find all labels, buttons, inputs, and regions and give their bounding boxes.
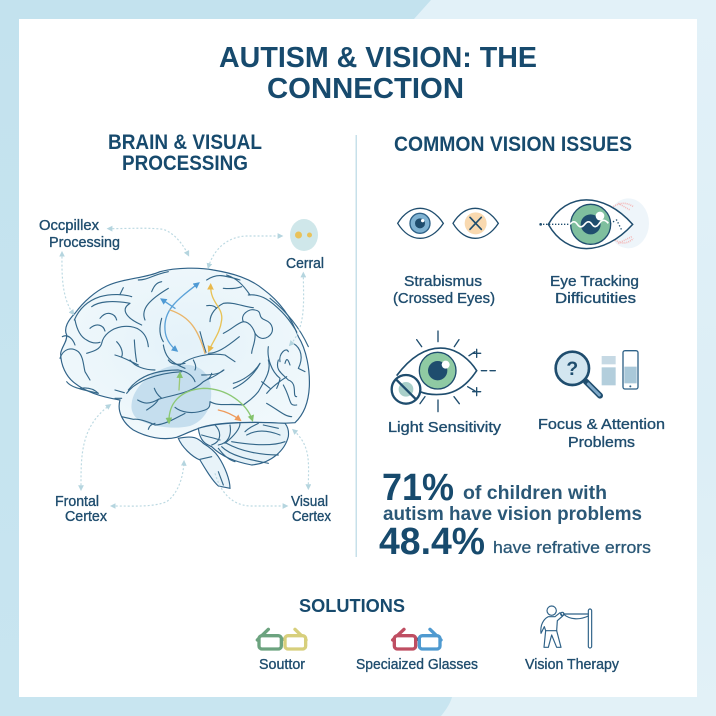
divider — [356, 135, 357, 557]
title: CONNECTION — [267, 73, 464, 105]
label: strabismus: Strabismus — [404, 274, 482, 290]
label: focus and attention: Problems — [568, 435, 635, 451]
statistic: 71 percent: 71% — [382, 467, 454, 509]
label: vision therapy: Vision Therapy — [525, 657, 620, 673]
label: strabismus: (Crossed Eyes) — [393, 291, 495, 307]
icon: strabismus eyes — [398, 208, 498, 238]
title: AUTISM & VISION: THE — [219, 42, 537, 74]
icon: focus magnifier and phone — [556, 351, 638, 396]
icon: green and yellow glasses — [257, 629, 306, 649]
label: visual certex: Certex — [292, 509, 332, 525]
brainstem — [178, 437, 230, 488]
statistic: 48.4 percent: 48.4% — [379, 521, 485, 563]
label: light sensitivity: Light Sensitivity — [388, 420, 502, 436]
coloured pathways — [162, 283, 252, 422]
dashed connector arrows — [62, 228, 309, 506]
panel: brain and visual processing — [39, 131, 332, 525]
label: occpillex processing: Occpillex — [39, 218, 100, 234]
statistic: 48.4 percent — [379, 521, 651, 563]
label: frontal certex — [55, 494, 108, 525]
icon: central node — [290, 219, 318, 251]
folds: parietal and occipital — [180, 275, 308, 388]
label: occpillex processing: Processing — [49, 235, 120, 251]
label: souttor: Souttor — [259, 657, 305, 673]
panel: common vision issues — [379, 133, 665, 563]
heading: common vision issues: COMMON VISION ISSUES — [394, 133, 632, 156]
label: eye tracking — [550, 274, 639, 307]
statistic: 71 percent: of children with — [463, 483, 607, 504]
label: visual certex: Visual — [291, 494, 328, 510]
label: focus and attention — [538, 417, 665, 451]
label: eye tracking: Eye Tracking — [550, 274, 639, 290]
icon: vision therapy figure — [541, 606, 592, 648]
label: strabismus — [393, 274, 495, 307]
label: frontal certex: Frontal — [55, 494, 99, 510]
label: specialized glasses: Speciaized Glasses — [356, 657, 478, 673]
icon: red and blue glasses — [393, 629, 441, 649]
icon: light sensitivity eye — [392, 331, 495, 412]
heading: brain and visual processing: PROCESSING — [122, 152, 248, 175]
title — [219, 42, 537, 105]
cerebellum — [198, 422, 289, 465]
panel: solutions — [257, 596, 620, 673]
brain outline — [61, 268, 309, 439]
temporal lobe highlight — [131, 365, 211, 428]
label: eye tracking: Difficutities — [555, 291, 636, 307]
folds: frontal — [60, 272, 185, 393]
icon: focus magnifier and phone: ? — [566, 359, 578, 380]
statistic: 71 percent — [382, 467, 642, 525]
label: frontal certex: Certex — [65, 509, 108, 525]
label: focus and attention: Focus & Attention — [538, 417, 665, 433]
label: visual certex — [291, 494, 332, 525]
folds: temporal and cerebellum — [115, 360, 297, 488]
icon: eye tracking — [539, 198, 649, 249]
heading: solutions: SOLUTIONS — [299, 596, 405, 616]
heading: brain and visual processing: BRAIN & VISUAL — [108, 131, 262, 154]
statistic: 71 percent: autism have vision problems — [383, 504, 642, 525]
heading: brain and visual processing — [108, 131, 262, 175]
label: cerral: Cerral — [286, 256, 324, 272]
brain diagram — [60, 228, 309, 506]
label: occpillex processing — [39, 218, 120, 251]
statistic: 48.4 percent: have refrative errors — [493, 538, 651, 557]
